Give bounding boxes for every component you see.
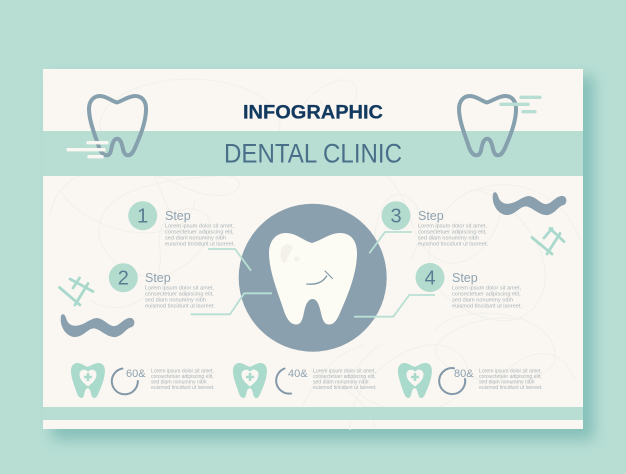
step 3: sed diam nonummy nibh bbox=[418, 236, 479, 242]
step 3: Step bbox=[418, 209, 444, 223]
stat: 60 bbox=[71, 363, 215, 398]
subtitle: DENTAL CLINIC bbox=[224, 138, 402, 168]
stat: 80: euismod tincidunt ut laoreet. bbox=[479, 385, 543, 391]
step 1 bbox=[128, 201, 235, 248]
stat: 40: sed diam nonummy nibh bbox=[313, 380, 369, 386]
icon: right outline tooth with speed lines bbox=[459, 96, 540, 155]
stat: 40: Lorem ipsum dolor sit amet, bbox=[313, 368, 376, 374]
step 4: sed diam nonummy nibh bbox=[452, 298, 513, 304]
icon: bottom-left hash mark bbox=[60, 278, 93, 305]
step 4 bbox=[416, 263, 522, 310]
stat: 80: 80& bbox=[454, 368, 474, 380]
connector: step 4 bbox=[354, 295, 435, 317]
step 4: euismod tincidunt ut laoreet. bbox=[452, 304, 522, 310]
step 4: Lorem ipsum dolor sit amet, bbox=[452, 286, 521, 292]
step 1: sed diam nonummy nibh bbox=[165, 236, 226, 242]
step 2: consectetuer adipiscing elit, bbox=[145, 292, 214, 298]
icon: central tooth bbox=[269, 233, 357, 324]
stat: 60: Lorem ipsum dolor sit amet, bbox=[151, 368, 214, 374]
step 2: euismod tincidunt ut laoreet. bbox=[145, 304, 215, 310]
title: INFOGRAPHIC bbox=[243, 102, 383, 124]
connector: step 1 bbox=[208, 249, 251, 271]
background doodle lines bbox=[50, 79, 580, 430]
step 2: 2 bbox=[118, 268, 129, 290]
step 3: 3 bbox=[390, 206, 402, 228]
step 4: Step bbox=[452, 271, 478, 285]
icon: top-right hash mark bbox=[532, 228, 564, 254]
step 1: Lorem ipsum dolor sit amet, bbox=[165, 224, 234, 230]
step 1: consectetuer adipiscing elit, bbox=[165, 230, 234, 236]
step 1: Step bbox=[165, 209, 191, 223]
icon: bottom-left squiggle bbox=[61, 314, 134, 337]
connector: step 2 bbox=[191, 293, 272, 314]
icon: top-right squiggle bbox=[493, 192, 566, 215]
bottom band bbox=[43, 407, 583, 420]
connector: step 3 bbox=[369, 232, 412, 253]
step 3 bbox=[382, 201, 488, 248]
stat: 60: consectetuer adipiscing elit, bbox=[151, 374, 214, 380]
stat: 80: consectetuer adipiscing elit, bbox=[479, 374, 542, 380]
stat: 40: 40& bbox=[288, 368, 308, 380]
step 4: 4 bbox=[424, 268, 436, 290]
step 2: sed diam nonummy nibh bbox=[145, 298, 206, 304]
step 3: consectetuer adipiscing elit, bbox=[418, 230, 487, 236]
stat: 60: euismod tincidunt ut laoreet. bbox=[151, 385, 215, 391]
stat: 80: sed diam nonummy nibh bbox=[479, 380, 535, 386]
step 4: consectetuer adipiscing elit, bbox=[452, 292, 521, 298]
central circle bbox=[239, 204, 387, 352]
step 1: 1 bbox=[137, 206, 148, 228]
step 3: Lorem ipsum dolor sit amet, bbox=[418, 224, 487, 230]
stat: 40: euismod tincidunt ut laoreet. bbox=[313, 385, 377, 391]
step 2 bbox=[109, 263, 215, 310]
step 2: Lorem ipsum dolor sit amet, bbox=[145, 286, 214, 292]
step 3: euismod tincidunt ut laoreet. bbox=[418, 242, 488, 248]
icon: left outline tooth with speed lines bbox=[68, 96, 146, 157]
stat: 80 bbox=[398, 363, 543, 398]
step 1: euismod tincidunt ut laoreet. bbox=[165, 242, 235, 248]
stat: 60: sed diam nonummy nibh bbox=[151, 380, 207, 386]
stat: 60: 60& bbox=[126, 368, 146, 380]
step 2: Step bbox=[145, 271, 171, 285]
stat: 80: Lorem ipsum dolor sit amet, bbox=[479, 368, 542, 374]
panel: card bbox=[43, 69, 583, 429]
header band bbox=[43, 131, 583, 176]
stat: 40: consectetuer adipiscing elit, bbox=[313, 374, 376, 380]
card shadow bbox=[52, 76, 594, 440]
stat: 40 bbox=[233, 363, 377, 398]
